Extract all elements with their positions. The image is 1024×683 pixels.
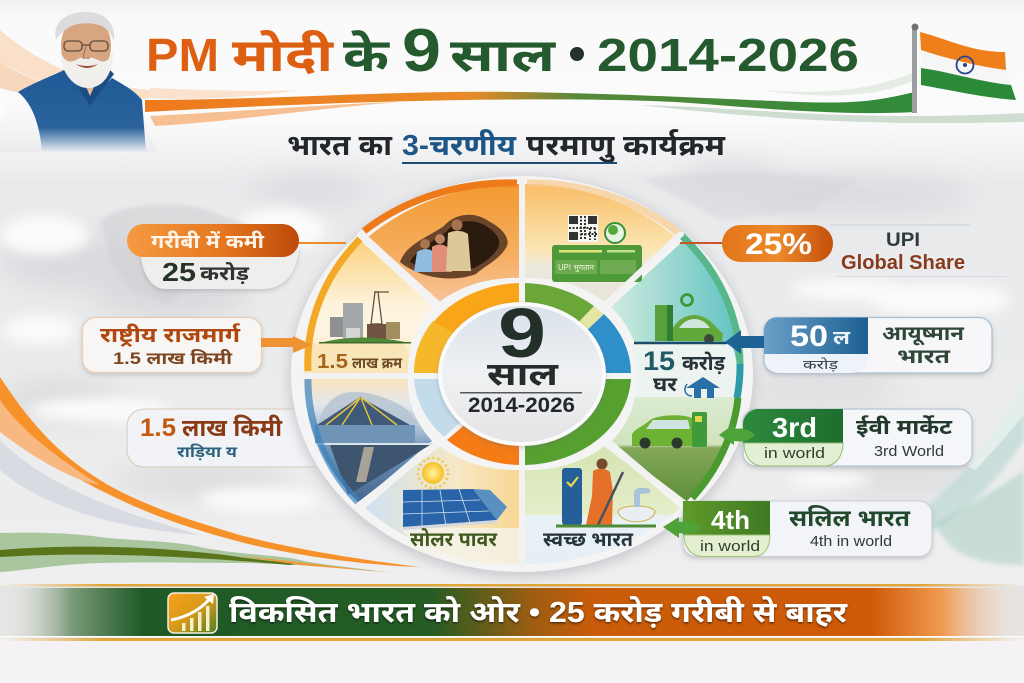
callout: Salil Bharat: in world [700,538,760,555]
centre hub: 2014-2026 [468,394,575,417]
callout: UPI global share: UPI [886,230,920,251]
segment: poverty reduction [367,184,519,303]
label: 15 crore homes: करोड़ [682,351,726,375]
title: PM [146,29,219,81]
segment: 15 crore homes [611,241,740,398]
callout: UPI global share: 25% [745,228,812,261]
icon: Indian flag [912,24,1016,113]
label: 15 crore homes [643,346,726,396]
callout: UPI global share: Global Share [841,252,965,274]
segment: clean India [525,445,680,564]
arrow: Ayushman to wheel [725,330,764,354]
icon: house [685,377,720,398]
callout: UPI global share [680,224,1006,277]
icon: growth chart [168,593,217,633]
callout: Salil Bharat: 4th in world [810,533,892,550]
arrow: Salil to wheel [663,517,700,538]
illustration: family emerging from broken wall [400,215,508,278]
subtitle heading: परमाणु कार्यक्रम [526,129,726,163]
illustration: plant and tower [319,292,411,344]
callout: Ayushman Bharat: भारत [897,346,951,368]
circular wheel [289,176,755,577]
callout: national highways: 1.5 लाख किमी [113,348,233,368]
centre hub [438,294,606,446]
segment: highway [304,377,433,503]
callout: poverty reduction: करोड़ [200,261,250,285]
segment: solar power [365,445,519,565]
callout: EV market: ईवी मार्केट [856,415,953,439]
centre hub: साल [487,356,560,392]
callout: EV market: in world [764,445,825,462]
callout: national highways [82,318,312,372]
callout: EV market [719,409,972,466]
title: 9 [402,17,441,84]
callout: 1.5 lakh km: 1.5 [140,414,176,442]
callout: Ayushman Bharat: 50 [790,320,828,353]
callout: national highways: राष्ट्रीय राजमार्ग [100,323,241,347]
callout: Ayushman Bharat: ल [833,328,851,349]
spoke dividers [297,176,688,572]
centre hub: 9 [498,294,546,372]
callout: Ayushman Bharat: आयूष्मान [882,323,965,346]
icon: UPI card [552,245,642,282]
illustration: road pyramid [315,392,433,495]
callout: poverty reduction [127,224,346,289]
callout: EV market: 3rd [772,412,817,443]
callout: Salil Bharat: 4th [711,505,750,535]
icon: sun [418,458,448,488]
subtitle heading [287,129,726,164]
title: मोदी [232,29,335,81]
label: 1.5 lakh: लाख क्रम [352,355,402,372]
segment: UPI [525,184,677,303]
progress ring around centre [409,278,635,470]
outer coloured rim [308,183,740,502]
illustration: green car and charger [632,412,707,448]
callout: Salil Bharat: सलिल भारत [789,505,911,531]
segment: nuclear power plant [304,241,433,373]
label: clean India: स्वच्छ भारत [543,529,634,551]
callout: poverty reduction: गरीबी में कमी [151,230,264,253]
title: 2014-2026 [597,29,859,81]
arrow: highways to wheel [261,336,312,353]
callout: 1.5 lakh km: राड़िया य [177,444,238,461]
callout: EV market: 3rd World [874,443,944,460]
segment: electric vehicles [612,397,738,503]
callout: 1.5 lakh km: लाख किमी [182,414,283,442]
label: 1.5 lakh: 1.5 [317,351,348,373]
callout: poverty reduction: 25 [162,257,196,287]
callout: Ayushman Bharat: करोड़ [803,357,839,372]
title: साल [450,29,556,81]
callout: Salil Bharat [663,501,932,556]
icon: solar panel [403,489,507,530]
decorative tricolour swooshes [0,30,1024,573]
portrait: Prime Minister [0,12,157,152]
title [146,17,859,84]
illustration: EV and charger [634,294,727,344]
icon: QR code [568,215,625,243]
subtitle heading: 3-चरणीय [402,129,517,162]
callout: 1.5 lakh km [127,409,335,467]
label: 1.5 lakh [317,351,402,373]
bottom banner [0,584,1024,641]
arrow: EV to wheel [719,424,755,445]
icon: UPI card: UPI भुगतान [558,263,595,273]
illustration: dispenser, worker and toilet [556,458,656,526]
label: 15 crore homes: 15 [643,346,675,376]
callout: Ayushman Bharat [725,318,992,373]
subtitle heading: भारत का [287,130,392,162]
bottom banner: विकसित भारत को ओर • 25 करोड़ गरीबी से बाहर [229,595,848,629]
label: solar power: सोलर पावर [410,527,498,551]
title: के [343,28,390,81]
label: 15 crore homes: घर [653,374,678,396]
